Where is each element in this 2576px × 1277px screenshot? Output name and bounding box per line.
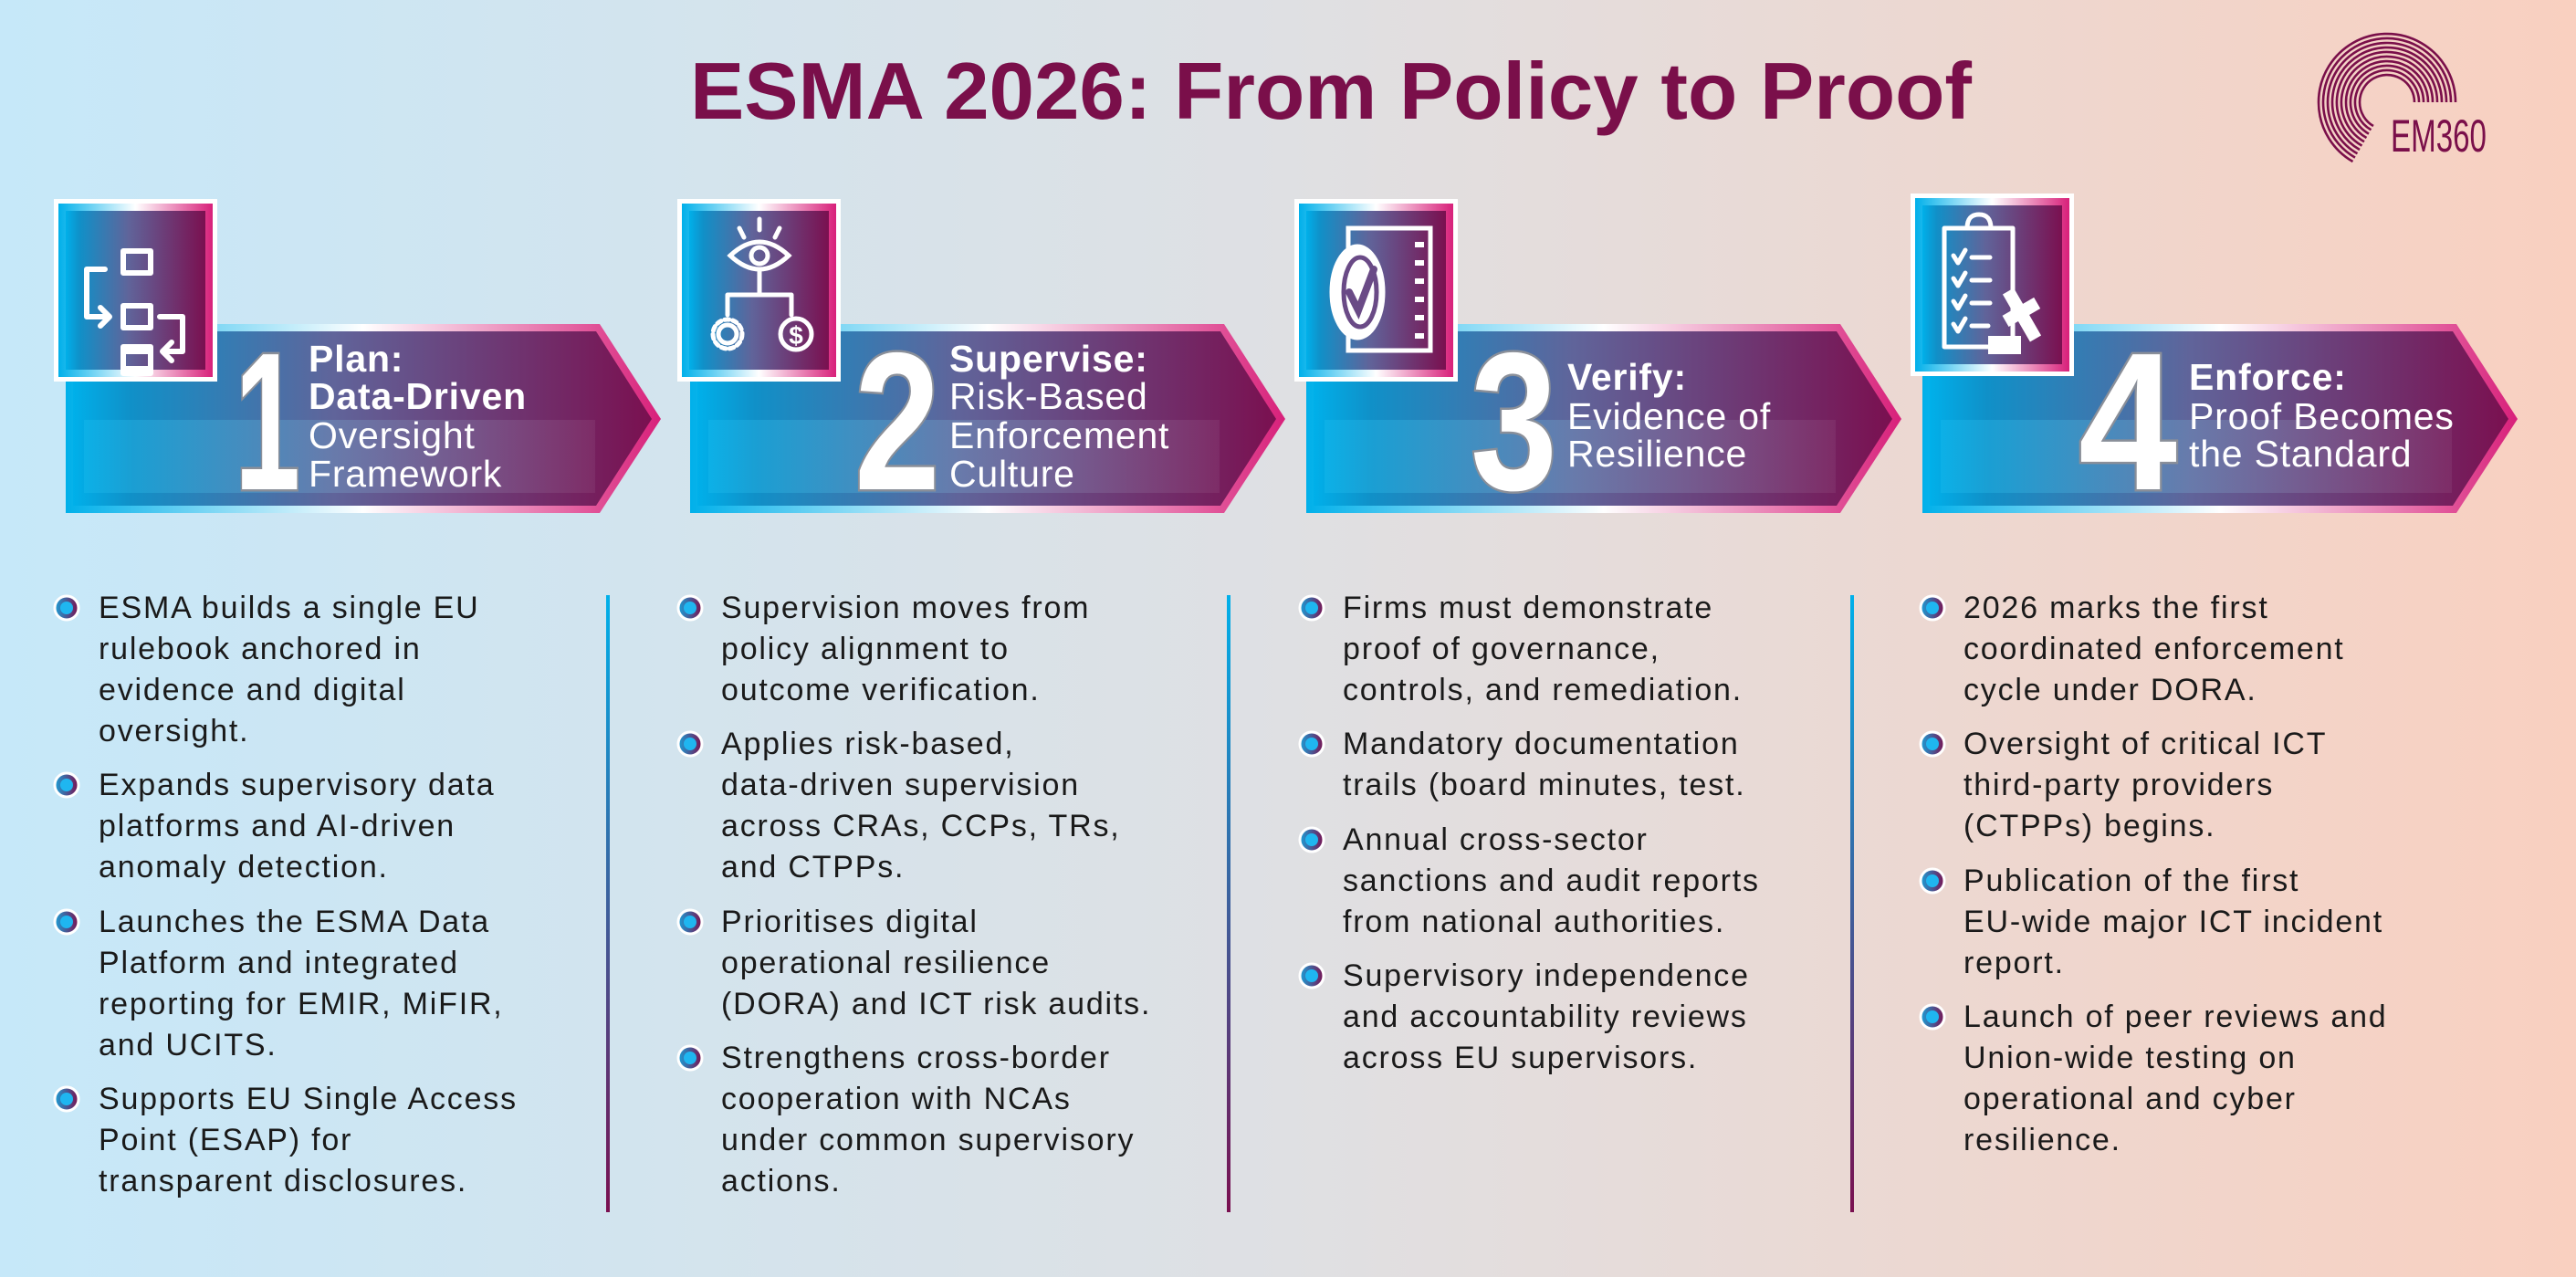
icon box 4: clipboard and gavel (1911, 194, 2074, 376)
bullet 1.1: oversight. (99, 714, 249, 748)
heading 2: Enforcement (949, 414, 1169, 456)
heading 1: Data-Driven (309, 375, 527, 417)
panel 2: Supervise (677, 199, 1285, 531)
bullet 2.3: (DORA) and ICT risk audits. (721, 987, 1151, 1021)
bullet 2.4 (678, 1041, 1135, 1198)
step number 1: 1 (235, 311, 300, 531)
panel 1: Plan (54, 199, 661, 531)
step number 3: 3 (1471, 311, 1557, 531)
bullet 1.2: platforms and AI-driven (99, 809, 456, 843)
bullet 1.3: Platform and integrated (99, 946, 459, 980)
bullet 2.4: cooperation with NCAs (721, 1082, 1072, 1116)
icon box 2: eye and org chart (677, 199, 841, 382)
bullet 3.1: proof of governance, (1343, 632, 1660, 666)
step number 4: 4 (2079, 311, 2177, 531)
bullet 4.4 (1921, 1000, 2388, 1157)
bullet 1.4: Supports EU Single Access (99, 1082, 518, 1116)
column 2 bullets (678, 591, 1151, 1198)
bullet 4.1: cycle under DORA. (1963, 673, 2257, 707)
heading 4: Proof Becomes (2189, 395, 2455, 437)
bullet 2.3 (678, 905, 1151, 1021)
bullet 4.2: Oversight of critical ICT (1963, 727, 2327, 761)
arrow banner 1 (66, 324, 661, 513)
heading 2: Supervise: (949, 338, 1148, 380)
bullet 4.2 (1921, 727, 2327, 843)
bullet 3.3: sanctions and audit reports (1343, 864, 1760, 898)
heading 4: the Standard (2189, 433, 2412, 475)
bullet 1.1 (55, 591, 479, 748)
bullet 1.3: and UCITS. (99, 1028, 277, 1062)
bullet 3.1: Firms must demonstrate (1343, 591, 1713, 625)
bullet 1.2: Expands supervisory data (99, 768, 495, 802)
bullet 2.3: Prioritises digital (721, 905, 979, 939)
bullet 1.4 (55, 1082, 518, 1198)
bullet 1.1: rulebook anchored in (99, 632, 422, 666)
bullet 1.4: Point (ESAP) for (99, 1123, 352, 1157)
bullet 1.2 (55, 768, 495, 884)
bullet 4.1 (1921, 591, 2345, 707)
bullet 4.4: operational and cyber (1963, 1082, 2297, 1116)
heading 3: Verify: (1567, 356, 1687, 398)
bullet 1.4: transparent disclosures. (99, 1164, 467, 1198)
bullet 3.1: controls, and remediation. (1343, 673, 1743, 707)
arrow banner 4 (1922, 324, 2518, 513)
bullet 4.3: Publication of the first (1963, 864, 2299, 898)
heading 3: Evidence of (1567, 395, 1771, 437)
heading 1: Oversight (309, 414, 476, 456)
heading 4: Enforce: (2189, 356, 2347, 398)
logo: EM360: EM360 (2391, 110, 2487, 162)
bullet 2.3: operational resilience (721, 946, 1051, 980)
bullet 4.3: report. (1963, 946, 2065, 980)
bullet 2.2: Applies risk-based, (721, 727, 1014, 761)
bullet 2.2 (678, 727, 1121, 884)
title: ESMA 2026: From Policy to Proof (690, 46, 1973, 136)
arrow banner 2 (690, 324, 1285, 513)
bullet 2.1 (678, 591, 1090, 707)
bullet 4.4: resilience. (1963, 1123, 2121, 1157)
bullet 4.1: 2026 marks the first (1963, 591, 2269, 625)
dividers (606, 595, 610, 1212)
bullet 4.4: Union-wide testing on (1963, 1041, 2297, 1075)
panel 4: Enforce (1911, 194, 2518, 531)
bullet 3.2: Mandatory documentation (1343, 727, 1740, 761)
column 1 bullets (55, 591, 518, 1198)
bullet 4.2: (CTPPs) begins. (1963, 809, 2215, 843)
bullet 3.2 (1300, 727, 1746, 802)
step number 2: 2 (854, 311, 940, 531)
arrow banner 3 (1306, 324, 1901, 513)
bullet 3.3: Annual cross-sector (1343, 822, 1649, 857)
heading 2: Culture (949, 453, 1075, 495)
icon box 2: eye and org chart: $ (789, 321, 803, 350)
heading 2: Risk-Based (949, 375, 1148, 417)
bullet 2.1: outcome verification. (721, 673, 1041, 707)
panel 3: Verify (1294, 199, 1901, 531)
bullet 3.2: trails (board minutes, test. (1343, 768, 1746, 802)
bullet 1.1: evidence and digital (99, 673, 406, 707)
bullet 4.4: Launch of peer reviews and (1963, 1000, 2388, 1034)
heading 1: Framework (309, 453, 502, 495)
bullet 1.3: Launches the ESMA Data (99, 905, 490, 939)
bullet 2.4: actions. (721, 1164, 842, 1198)
bullet 2.1: policy alignment to (721, 632, 1010, 666)
bullet 1.3 (55, 905, 504, 1062)
icon box 1: flowchart (54, 199, 217, 382)
bullet 2.2: data-driven supervision (721, 768, 1080, 802)
bullet 3.3: from national authorities. (1343, 905, 1725, 939)
bullet 2.2: and CTPPs. (721, 850, 905, 884)
bullet 3.4: Supervisory independence (1343, 958, 1750, 993)
bullet 3.1 (1300, 591, 1743, 707)
logo: EM360 (2319, 34, 2487, 162)
bullet 1.1: ESMA builds a single EU (99, 591, 479, 625)
heading 1: Plan: (309, 338, 403, 380)
bullet 4.2: third-party providers (1963, 768, 2274, 802)
bullet 2.4: under common supervisory (721, 1123, 1135, 1157)
heading 3: Resilience (1567, 433, 1747, 475)
bullet 2.1: Supervision moves from (721, 591, 1090, 625)
column 4 bullets (1921, 591, 2388, 1157)
bullet 3.4: across EU supervisors. (1343, 1041, 1698, 1075)
bullet 4.3 (1921, 864, 2383, 980)
icon box 3: checkmark badge (1294, 199, 1458, 382)
column 3 bullets (1300, 591, 1760, 1075)
bullet 2.2: across CRAs, CCPs, TRs, (721, 809, 1121, 843)
bullet 1.3: reporting for EMIR, MiFIR, (99, 987, 504, 1021)
bullet 2.4: Strengthens cross-border (721, 1041, 1111, 1075)
bullet 4.1: coordinated enforcement (1963, 632, 2345, 666)
bullet 3.4: and accountability reviews (1343, 1000, 1748, 1034)
bullet 4.3: EU-wide major ICT incident (1963, 905, 2383, 939)
bullet 3.4 (1300, 958, 1750, 1075)
bullet 1.2: anomaly detection. (99, 850, 389, 884)
bullet 3.3 (1300, 822, 1760, 939)
